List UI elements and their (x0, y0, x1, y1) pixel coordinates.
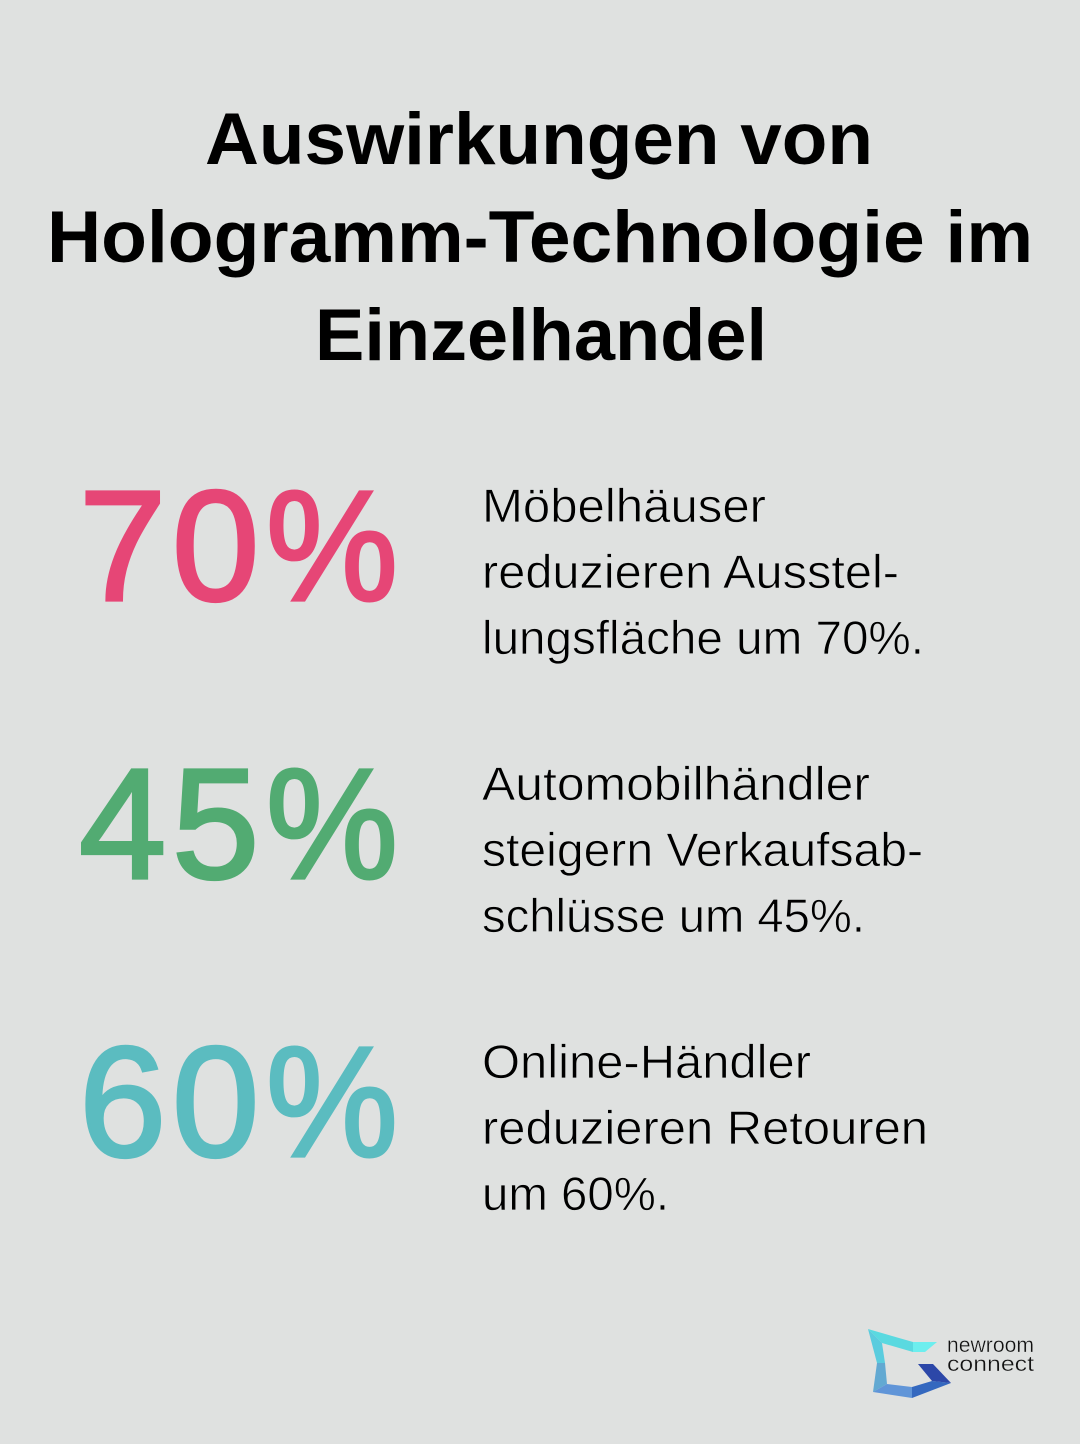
logo: newroom connect (868, 1329, 1034, 1398)
big number: 70%: 7 (79, 459, 166, 634)
logo wordmark: connect (947, 1353, 1034, 1376)
description: furniture stores: lungsfläche um 70%. (482, 611, 924, 664)
title: Einzelhandel (315, 295, 767, 376)
title (47, 99, 1033, 376)
big number: 70%: 0 (172, 459, 259, 634)
description: online retailers (482, 1035, 928, 1220)
description: furniture stores: Möbelhäuser (482, 479, 766, 532)
logo mark (868, 1329, 951, 1398)
logo wordmark: newroom (947, 1334, 1034, 1357)
description: car dealers: Automobilhändler (482, 757, 870, 810)
big number: 60%: 0 (172, 1015, 259, 1190)
big number: 60%: % (266, 1015, 398, 1190)
description: car dealers (482, 757, 923, 942)
big number: 70%: % (266, 459, 398, 634)
statistic: 70% (79, 459, 924, 664)
title: Hologramm-Technologie im (47, 197, 1033, 278)
big number: 45%: 5 (172, 737, 259, 912)
description: online retailers: Online-Händler (482, 1035, 811, 1088)
description: car dealers: schlüsse um 45%. (482, 889, 865, 942)
description: online retailers: um 60%. (482, 1167, 669, 1220)
big number: 45%: % (266, 737, 398, 912)
description: online retailers: reduzieren Retouren (482, 1101, 928, 1154)
description: car dealers: steigern Verkaufsab- (482, 823, 923, 876)
big number: 60%: 6 (79, 1015, 166, 1190)
statistic: 60% (79, 1015, 928, 1220)
logo wordmark (947, 1334, 1034, 1376)
description: furniture stores (482, 479, 924, 664)
big number: 45%: 4 (79, 737, 166, 912)
description: furniture stores: reduzieren Ausstel- (482, 545, 899, 598)
statistic: 45% (79, 737, 923, 942)
title: Auswirkungen von (205, 99, 873, 180)
